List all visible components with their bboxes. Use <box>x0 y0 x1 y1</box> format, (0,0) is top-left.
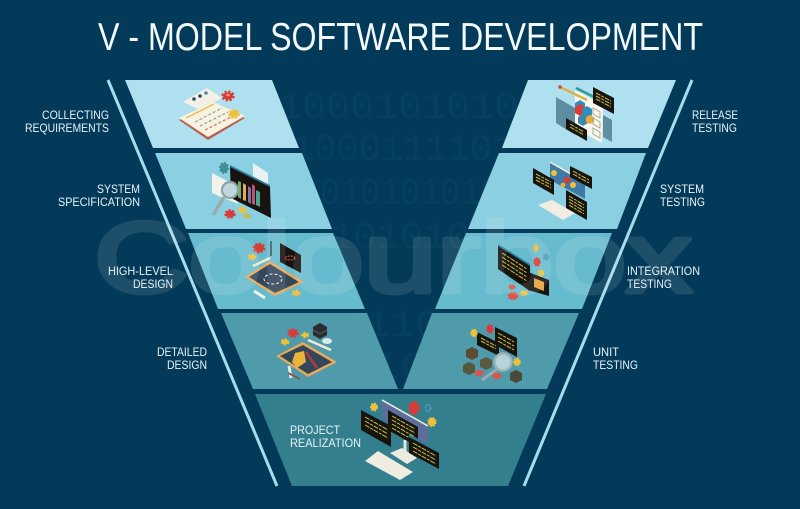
label: integration testing: INTEGRATION <box>627 264 700 278</box>
label: system specification <box>58 182 140 209</box>
panel: high-level design <box>188 233 365 309</box>
background binary digits: 1110 <box>340 305 440 348</box>
icon: unit testing screens, boxes and magnifier <box>463 325 522 383</box>
label: high-level design <box>108 264 173 291</box>
panel: collecting requirements <box>125 80 299 148</box>
icon: design board with screen <box>245 241 304 298</box>
label: integration testing: TESTING <box>627 277 672 291</box>
icon: integration testing screen and phone <box>498 244 549 299</box>
label: integration testing <box>627 264 700 291</box>
icon: chart screen and magnifier <box>212 163 271 218</box>
label: detailed design <box>157 345 207 372</box>
label: unit testing: UNIT <box>593 345 620 359</box>
background binary digits: 1010101010 <box>300 173 500 216</box>
icon: documents and gears <box>179 88 245 140</box>
label: unit testing <box>593 345 638 372</box>
panel: system testing <box>468 153 646 229</box>
label: project realization: REALIZATION <box>290 436 361 450</box>
panel: integration testing <box>435 233 612 309</box>
label: release testing: TESTING <box>692 121 737 135</box>
watermark: Colourbox <box>94 202 692 314</box>
label: collecting requirements: REQUIREMENTS <box>25 121 109 135</box>
background binary digits: 10 <box>370 347 430 390</box>
icon: release testing pages <box>556 85 614 143</box>
label: high-level design: HIGH-LEVEL <box>108 264 173 278</box>
label: high-level design: DESIGN <box>133 277 173 291</box>
label: project realization: PROJECT <box>290 423 341 437</box>
label: release testing <box>692 108 738 135</box>
label: system testing: SYSTEM <box>660 182 704 196</box>
panel: unit testing <box>403 313 579 389</box>
label: collecting requirements: COLLECTING <box>42 108 109 122</box>
label: system testing: TESTING <box>660 195 705 209</box>
icon: project realization monitor and keyboard <box>361 400 439 480</box>
panel: system specification <box>155 153 332 229</box>
label: detailed design: DETAILED <box>157 345 207 359</box>
background binary digits <box>278 87 518 390</box>
panel: detailed design <box>221 313 398 389</box>
label: collecting requirements <box>25 108 109 135</box>
icon: detailed design board <box>276 323 337 379</box>
label: project realization <box>290 423 361 450</box>
label: system specification: SYSTEM <box>97 182 140 196</box>
background binary digits: 1000101010 <box>278 87 518 130</box>
label: detailed design: DESIGN <box>167 358 207 372</box>
label: unit testing: TESTING <box>593 358 638 372</box>
panel: project realization <box>255 394 546 486</box>
right diagonal line <box>524 80 692 486</box>
label: system specification: SPECIFICATION <box>58 195 140 209</box>
background binary digits: 1000111101 <box>292 129 514 172</box>
label: system testing <box>660 182 705 209</box>
icon: system testing screens and keyboard <box>533 162 592 220</box>
label: release testing: RELEASE <box>692 108 738 122</box>
left diagonal line <box>108 80 277 486</box>
background binary digits: 101010 <box>330 217 470 260</box>
panel: release testing <box>502 80 676 148</box>
